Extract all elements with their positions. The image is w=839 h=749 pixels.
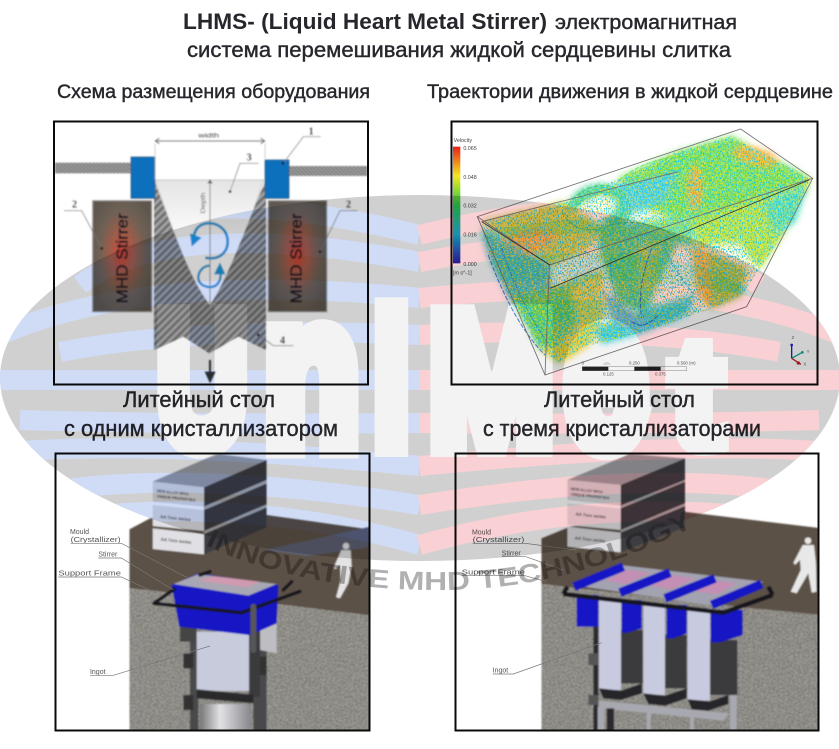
axis triad: Y (807, 349, 810, 354)
ingot stack bottom (567, 506, 685, 552)
heading: single-mould table: с одним кристаллизатором (64, 416, 338, 441)
ingot stack middle: AA 7xxx series (575, 511, 607, 520)
title: электромагнитная (555, 12, 737, 34)
support frame (563, 587, 773, 613)
depth dimension: Depth (200, 192, 207, 213)
dark stripe on ground (265, 526, 373, 556)
callout 3: 3 (247, 152, 252, 163)
watermark: UniMet letters: n (264, 253, 359, 492)
panel: single mould casting table (58, 454, 373, 731)
labels: Support Frame (462, 569, 525, 576)
panel: three mould casting table (462, 454, 822, 731)
scale bar (582, 361, 696, 376)
ingot stack bottom (153, 507, 267, 554)
colour legend: 0.016 (463, 233, 477, 239)
labels: Ingot (90, 669, 106, 676)
watermark: UniMet letters: t (672, 309, 722, 479)
blue mould blocks (131, 157, 289, 198)
flow streamlines texture (482, 137, 810, 362)
soil (542, 584, 822, 731)
right stirrer (268, 201, 327, 312)
support frame (154, 572, 300, 650)
colour legend (453, 138, 477, 277)
axis triad: Z (792, 335, 795, 340)
watermark: UniMet letters: i (373, 275, 410, 487)
stirrer blue block (172, 573, 278, 635)
labels: (Crystallizer) (71, 537, 121, 544)
heading: single-mould table (64, 387, 338, 441)
dark ingot sides (621, 630, 737, 695)
casting pit equipment (180, 623, 277, 731)
callout 2 right: 2 (346, 200, 351, 211)
heading: three-mould table (483, 387, 761, 441)
callout 4 (257, 334, 293, 347)
callout 1: 1 (309, 126, 314, 137)
mould top plate (173, 574, 277, 596)
ingot stack middle (153, 483, 267, 531)
watermark: UniMet letters: e (565, 254, 646, 491)
soil (129, 588, 373, 731)
labels: Support Frame (58, 571, 121, 578)
colour legend: 0.048 (463, 175, 477, 181)
ingots (599, 598, 710, 701)
heading: trajectories: Траектории движения в жидкой сердцевине (427, 82, 833, 103)
callout 2 right (319, 200, 357, 253)
streamline arcs (488, 157, 712, 355)
ingot stack top: UNIQUE PROPERTIES (571, 492, 610, 500)
callout 2 left: 2 (72, 200, 77, 211)
labels: Mould (70, 529, 89, 536)
left stirrer (93, 201, 152, 312)
flow arrow upper (190, 223, 228, 258)
watermark: UniMet globe logo (0, 195, 839, 590)
title (183, 9, 737, 62)
callout 2 left (64, 200, 103, 250)
ingot stack bottom: AA 7xxx series (575, 535, 606, 544)
colour legend: 0.000 (463, 262, 477, 268)
panel border 2 (452, 122, 818, 384)
output arrow (205, 360, 216, 383)
scale bar: 0.250 (629, 360, 640, 365)
lower support structure (588, 627, 737, 731)
ingot stack top: NEW ALLOY WITH (571, 487, 603, 494)
heading: single-mould table: Литейный стол (123, 387, 275, 412)
blue bars (574, 567, 762, 605)
solid shell hatched (154, 180, 266, 353)
top plate (572, 565, 763, 607)
labels: (Crystallizer) (473, 537, 524, 544)
colour legend: Velocity (454, 138, 472, 144)
panel border 1 (54, 122, 368, 384)
watermark: UniMet letters (157, 253, 722, 492)
callout 4: 4 (280, 336, 285, 347)
ground top surface (129, 515, 373, 616)
watermark: UniMet letters: M (429, 275, 554, 487)
scale bar: 0.125 (603, 372, 614, 377)
flow arrow lower (198, 262, 225, 287)
ingot bases (599, 683, 728, 711)
ground top surface (542, 512, 822, 615)
labels: Ingot (493, 668, 508, 675)
axis triad: X (803, 362, 806, 367)
labels: Mould (472, 530, 491, 537)
ingot stack bottom: AA 7xxx series (161, 537, 192, 545)
cyan streaks (482, 137, 810, 362)
heading: three-mould table: Литейный стол (544, 387, 695, 412)
ingot stack top: UNIQUE PROPERTIES (157, 494, 196, 502)
yellow streaks (482, 137, 810, 362)
panel border 4 (456, 454, 818, 730)
callout 1 (282, 126, 321, 165)
ingot stack top (153, 454, 267, 534)
title: LHMS- (Liquid Heart Metal Stirrer) (183, 9, 547, 34)
watermark: striped ellipse (0, 190, 839, 570)
heading: three-mould table: с тремя кристаллизаторами (483, 416, 761, 441)
colour legend: 0.032 (463, 204, 477, 210)
bounding box (477, 129, 813, 375)
flow colour wash (482, 137, 810, 362)
labels (58, 529, 210, 676)
mould table bars (55, 163, 367, 176)
scale bar: 0 (582, 360, 585, 365)
left stirrer: MHD Stirrer (114, 213, 131, 303)
watermark: UniMet letters: U (157, 275, 248, 487)
labels (462, 530, 602, 675)
width dimension: width (197, 133, 219, 140)
watermark: tagline: INNOVATIVE MHD TECHNOLOGY (207, 510, 686, 590)
ingot stack top: NEW ALLOY WITH (157, 489, 189, 496)
pink metal pools (605, 570, 737, 594)
labels: Stirrer (98, 552, 118, 559)
colour legend: 0.065 (463, 146, 477, 152)
panel border 3 (56, 454, 370, 730)
ingot (197, 627, 260, 697)
ingot stack top (567, 454, 685, 533)
ingot stack middle (567, 482, 685, 530)
panel: velocity trajectories (453, 129, 813, 377)
blue stirrers (577, 595, 743, 642)
ingot base (197, 689, 253, 703)
callout 3 (229, 152, 258, 193)
liquid core (155, 180, 264, 305)
labels: Stirrer (502, 550, 521, 557)
axis triad (790, 335, 810, 367)
scale bar: 0.500 (m) (677, 360, 696, 365)
scale bar: 0.375 (655, 372, 666, 377)
panel: stirrer schematic (55, 126, 367, 383)
heading: equipment layout: Схема размещения оборудования (57, 82, 370, 103)
right stirrer: MHD Stirrer (289, 213, 306, 303)
colour legend: [m s^-1] (453, 271, 472, 277)
cylinder ram (200, 704, 250, 731)
person (791, 537, 817, 593)
title: система перемешивания жидкой сердцевины слитка (187, 39, 731, 62)
depth dimension (200, 179, 213, 303)
ingot stack middle: AA 7xxx series (160, 514, 191, 522)
person (334, 543, 352, 598)
width dimension (155, 133, 265, 180)
